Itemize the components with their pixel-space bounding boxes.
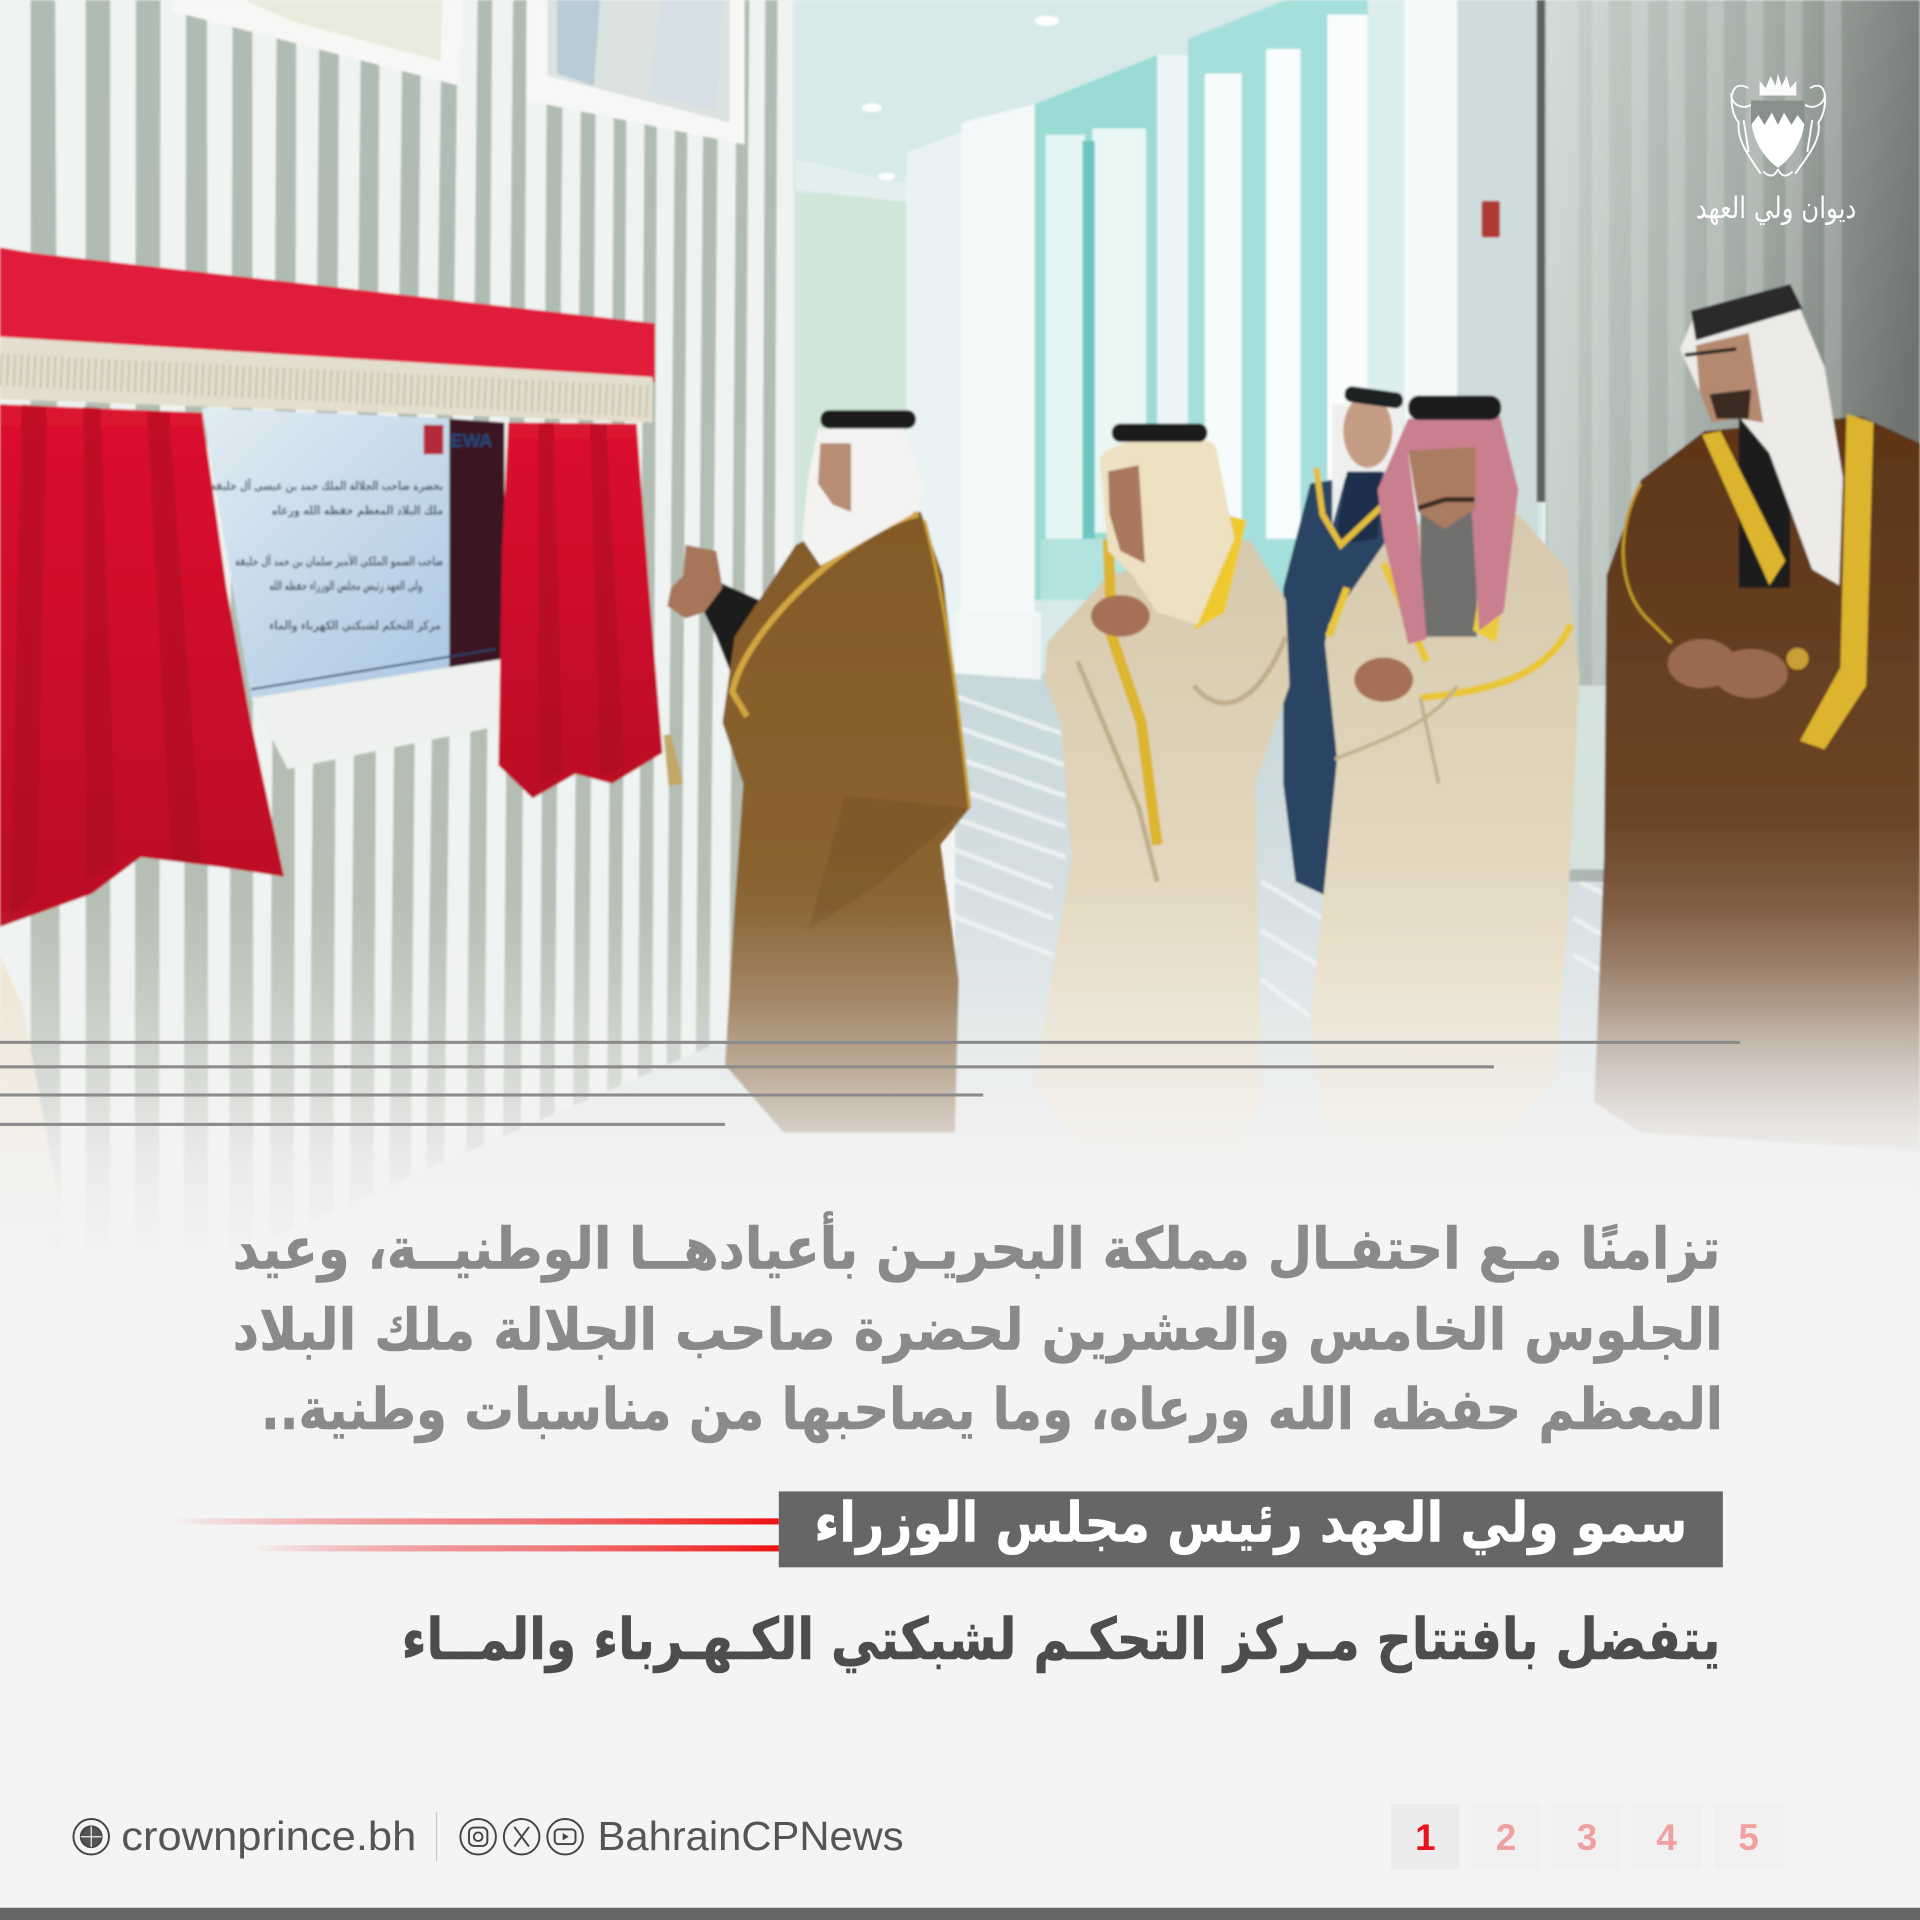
white column and grey wall with fire alarm — [1404, 0, 1547, 534]
intro paragraph — [233, 1212, 1723, 1444]
plaque white mount — [251, 659, 504, 769]
intro line 1: تزامنًا مـع احتفـال مملكة البحريـن بأعيادهــا الوطنيــة، وعيد — [233, 1212, 1720, 1284]
intro line 2: الجلوس الخامس والعشرين لحضرة صاحب الجلالة ملك البلاد — [233, 1296, 1723, 1364]
glass window left — [1035, 55, 1157, 600]
page 4 — [1633, 1804, 1702, 1870]
icon: globe — [73, 1819, 109, 1854]
floor — [245, 612, 1920, 1249]
social handle text: BahrainCPNews — [598, 1813, 904, 1859]
plaque — [202, 408, 504, 698]
page 1 current: 1 — [1415, 1817, 1436, 1858]
website text: crownprince.bh — [121, 1813, 416, 1859]
icon: x — [504, 1819, 539, 1854]
man 4 in cream robe with red headdress — [1310, 396, 1580, 1145]
man 1 head — [802, 410, 924, 566]
intro line 3: المعظم حفظه الله ورعاه، وما يصاحبها من مناسبات وطنية.. — [261, 1376, 1723, 1444]
title text: سمو ولي العهد رئيس مجلس الوزراء — [814, 1491, 1687, 1556]
plaque: ولي العهد رئيس مجلس الوزراء حفظه الله — [269, 579, 422, 593]
logo: crown prince's court — [1696, 73, 1856, 226]
man 2 in cream robe — [1035, 424, 1289, 1157]
logo crown — [1760, 73, 1796, 96]
page 3: 3 — [1577, 1817, 1597, 1858]
page 5 — [1714, 1804, 1783, 1870]
red accent lines — [171, 1518, 779, 1551]
logo wordmark: ديوان ولي العهد — [1696, 191, 1856, 226]
left curtain — [0, 404, 284, 927]
footer divider — [436, 1812, 437, 1861]
man 3 head — [1332, 385, 1404, 527]
corridor: ceiling, green wall and columns — [793, 0, 1543, 686]
page 3 — [1553, 1804, 1621, 1870]
lower photo fade — [0, 906, 1920, 1251]
logo wreath — [1731, 86, 1825, 176]
subtitle: يتفضل بافتتاح مـركز التحكـم لشبكتي الكـهـرباء والمــاء — [402, 1606, 1720, 1674]
man 1 in brown robe — [664, 410, 970, 1133]
logo shield — [1751, 100, 1805, 168]
plaque: ملك البلاد المعظم حفظه الله ورعاه — [272, 503, 443, 517]
icon: instagram — [460, 1819, 496, 1854]
icon: youtube — [547, 1819, 583, 1854]
page 2: 2 — [1496, 1817, 1516, 1858]
plaque: صاحب السمو الملكي الأمير سلمان بن حمد آل خليفة — [235, 554, 443, 569]
left slatted wall — [0, 0, 796, 1249]
man 3 in navy robe — [1283, 385, 1404, 902]
man 5 in dark brown robe — [1594, 284, 1920, 1151]
plaque: مركز التحكم لشبكتي الكهرباء والماء — [269, 618, 441, 632]
right curtain — [498, 422, 662, 798]
man 4 head — [1378, 396, 1518, 644]
footer: website and social — [73, 1812, 904, 1861]
fringe — [0, 337, 653, 422]
photo: unveiling ceremony — [0, 0, 1920, 1251]
page 2 — [1472, 1804, 1540, 1870]
plaque logo: EWA — [451, 430, 492, 451]
pagination — [1391, 1804, 1783, 1870]
framed picture right — [527, 0, 744, 144]
man 5 head — [1680, 284, 1843, 585]
bottom band — [0, 1908, 1920, 1920]
framed picture left — [171, 0, 463, 86]
man 2 head — [1100, 424, 1234, 624]
glass window right with white columns — [1156, 0, 1386, 596]
right slatted wall — [1545, 0, 1920, 882]
page 5: 5 — [1738, 1817, 1759, 1858]
person at lower-left edge — [0, 958, 51, 1170]
page 1 current — [1391, 1804, 1460, 1870]
plaque logo — [424, 425, 492, 454]
decorative grey lines over the photo — [0, 1041, 1740, 1126]
page 4: 4 — [1656, 1817, 1677, 1858]
plaque: بحضرة صاحب الجلالة الملك حمد بن عيسى آل خليفة — [211, 478, 443, 493]
title banner — [779, 1491, 1723, 1567]
red valance — [0, 247, 655, 382]
